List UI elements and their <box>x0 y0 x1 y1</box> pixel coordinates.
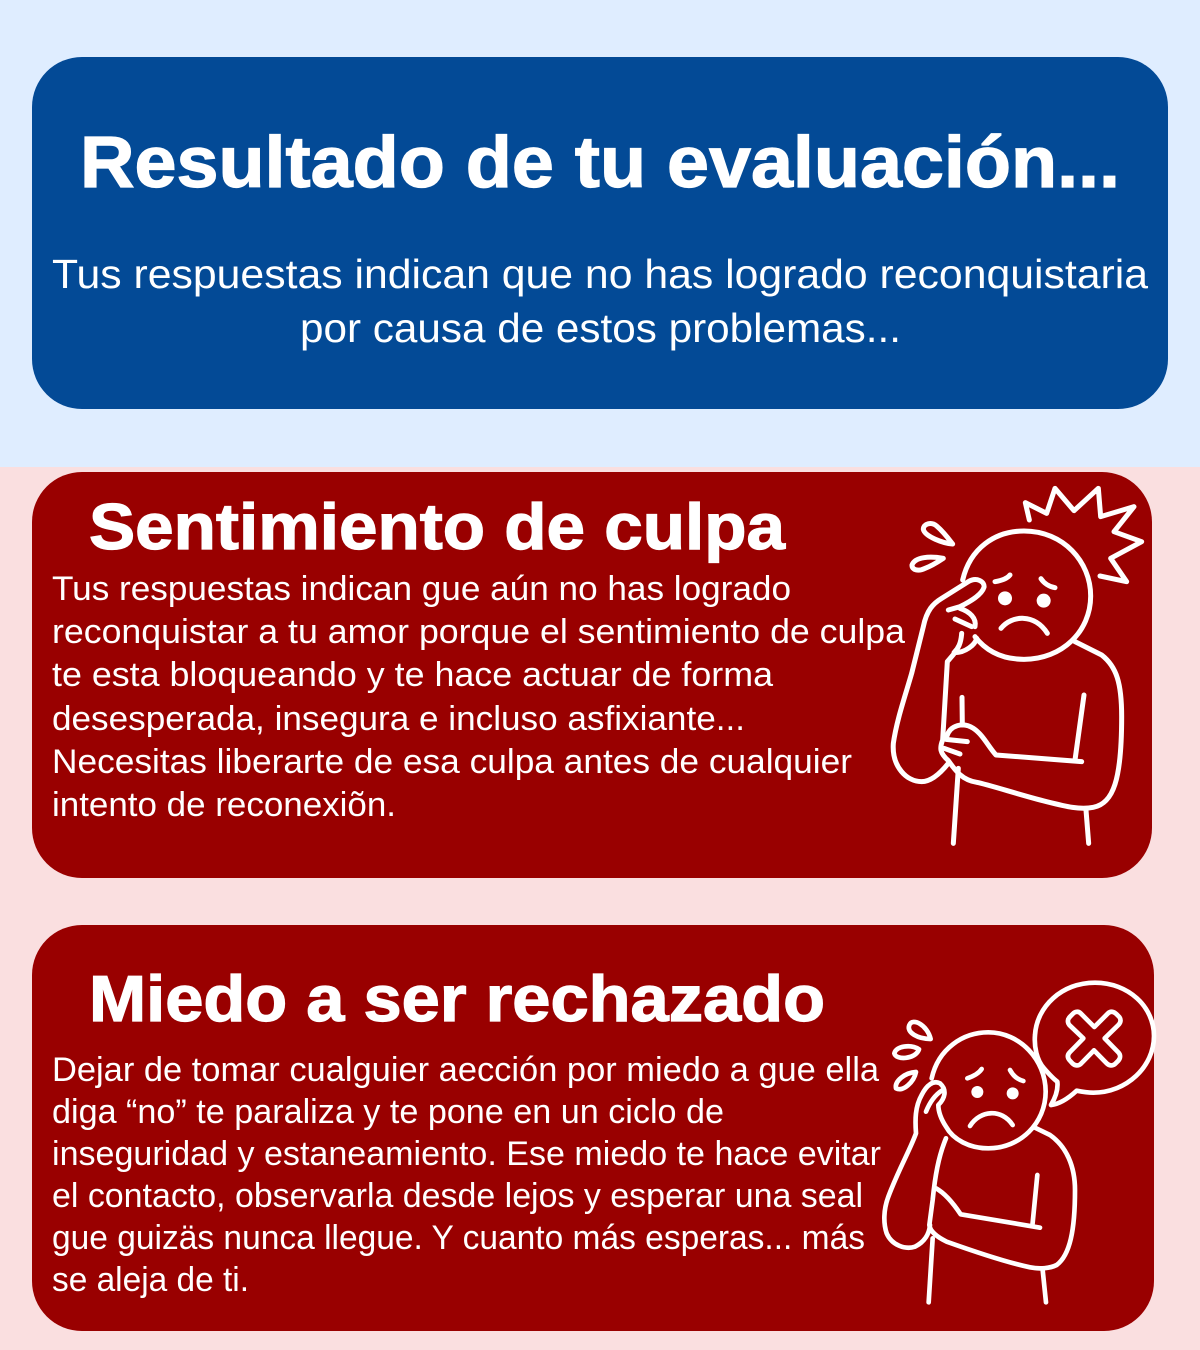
text block: culpa: Tus respuestas indican gue aún no has logrado <box>52 570 791 608</box>
text block: culpa: intento de reconexiõn. <box>52 786 396 824</box>
text block: miedo: Dejar de tomar cualguier aección por miedo a gue ella <box>52 1051 879 1089</box>
text block: culpa: te esta bloqueando y te hace actuar de forma <box>52 656 773 694</box>
text block: culpa: Necesitas liberarte de esa culpa antes de cualquier <box>52 743 852 781</box>
icon: worried person with rejection bubble <box>884 983 1154 1302</box>
title: Resultado de tu evaluación... <box>80 123 1120 203</box>
text block: miedo: diga “no” te paraliza y te pone en un ciclo de <box>52 1093 724 1131</box>
subtitle: Tus respuestas indican que no has logrado reconquistaria <box>52 251 1148 297</box>
text block: miedo: gue guizäs nunca llegue. Y cuanto más esperas... más <box>52 1219 865 1257</box>
panel: sentimiento de culpa <box>32 472 1152 878</box>
text block: miedo <box>52 1051 881 1299</box>
panel: miedo a ser rechazado <box>32 925 1154 1331</box>
icon: worried person touching forehead <box>893 488 1142 843</box>
text block: culpa: reconquistar a tu amor porque el sentimiento de culpa <box>52 613 905 651</box>
heading: miedo a ser rechazado: Miedo a ser rechazado <box>89 962 825 1035</box>
subtitle <box>52 251 1148 351</box>
text block: culpa: desesperada, insegura e incluso asfixiante... <box>52 700 745 738</box>
text block: miedo: se aleja de ti. <box>52 1261 249 1299</box>
text block: miedo: el contacto, observarla desde lejos y esperar una seal <box>52 1177 863 1215</box>
heading: sentimiento de culpa: Sentimiento de culpa <box>89 490 786 563</box>
text block: culpa <box>52 570 905 824</box>
subtitle: por causa de estos problemas... <box>300 305 901 351</box>
header panel <box>32 57 1168 409</box>
text block: miedo: inseguridad y estaneamiento. Ese miedo te hace evitar <box>52 1135 881 1173</box>
